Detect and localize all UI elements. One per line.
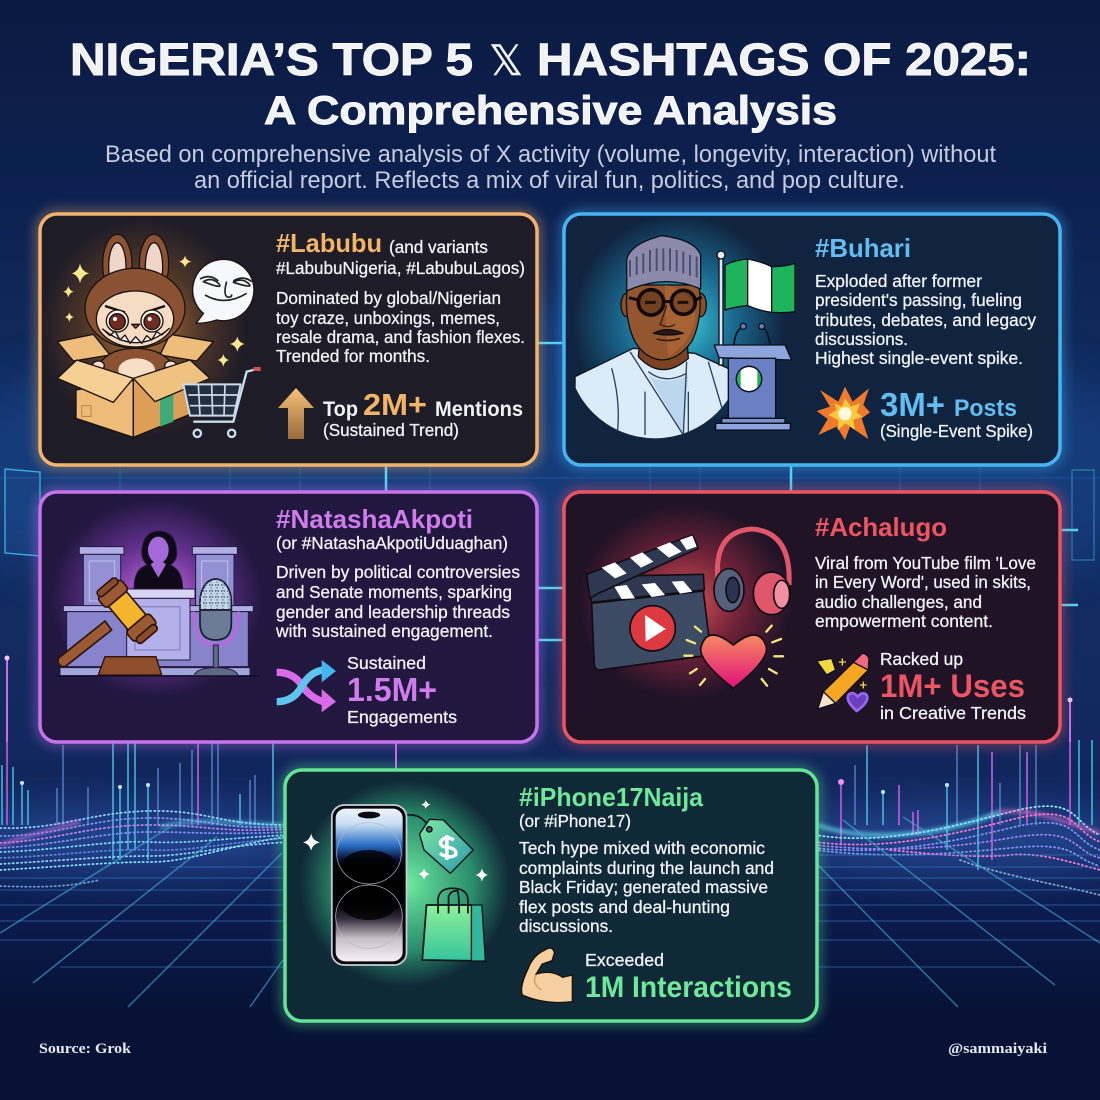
stat: 1M interactions: Exceeded xyxy=(585,950,664,970)
description xyxy=(815,271,1036,368)
stat: 3M+ posts: (Single-Event Spike) xyxy=(880,421,1033,441)
hashtag variants xyxy=(276,237,525,278)
description: discussions. xyxy=(815,329,908,349)
description: president's passing, fueling xyxy=(815,290,1022,310)
description: in Every Word', used in skits, xyxy=(815,572,1031,592)
description: empowerment content. xyxy=(815,611,993,631)
description: Tech hype mixed with economic xyxy=(519,838,765,858)
title: A Comprehensive Analysis xyxy=(264,89,837,133)
panel: #NatashaAkpoti xyxy=(40,492,537,742)
dotted waves xyxy=(0,806,1100,895)
meme bubble xyxy=(193,259,254,323)
description: Exploded after former xyxy=(815,271,982,291)
stat: 1M+ uses: in Creative Trends xyxy=(880,703,1026,723)
subtitle text: Based on comprehensive analysis of X activity (volume, longevity, interaction) without xyxy=(105,141,996,168)
gavel xyxy=(58,621,112,667)
heading: #iPhone17Naija xyxy=(519,782,704,812)
panel: #Buhari xyxy=(564,214,1060,465)
heading: #NatashaAkpoti xyxy=(276,504,473,534)
source credit: Source: Grok xyxy=(39,1041,132,1057)
stat: 2M+ mentions: (Sustained Trend) xyxy=(323,420,459,440)
woman silhouette xyxy=(134,531,183,589)
stat: 1.5M+ engagements: Engagements xyxy=(347,707,457,727)
panel: #Labubu xyxy=(40,214,537,465)
icon: Labubu in a box with meme and cart xyxy=(40,218,261,438)
stat: 1M interactions xyxy=(585,950,792,1004)
stat: 3M+ posts: Posts xyxy=(954,395,1017,422)
title: NIGERIA’S TOP 5 xyxy=(70,34,473,85)
title: 𝕏 xyxy=(489,36,523,85)
icon: shuffle arrows xyxy=(277,660,336,712)
description: audio challenges, and xyxy=(815,592,982,612)
stat: 1.5M+ engagements: 1.5M+ xyxy=(347,671,437,708)
description: with sustained engagement. xyxy=(275,621,493,641)
stat: 2M+ mentions: Mentions xyxy=(435,398,523,421)
stat: 2M+ mentions: 2M+ xyxy=(363,387,427,422)
equalizer bars xyxy=(2,740,1092,870)
subtitle text xyxy=(105,141,996,194)
sparkles xyxy=(63,256,245,367)
stat: 3M+ posts: 3M+ xyxy=(880,386,945,423)
icon: phone, price tag and shopping bag xyxy=(300,780,510,987)
description: Viral from YouTube film 'Love xyxy=(815,553,1036,573)
icon: clapperboard, headphones and heart xyxy=(578,505,792,698)
hashtag variants: #LabubuNigeria, #LabubuLagos) xyxy=(276,258,525,278)
stat: 1M+ uses: Racked up xyxy=(880,649,963,669)
description: Black Friday; generated massive xyxy=(519,877,768,897)
stat: 1M+ uses xyxy=(880,649,1026,723)
microphone xyxy=(193,612,238,645)
description: tributes, debates, and legacy xyxy=(815,310,1036,330)
podium xyxy=(734,327,770,345)
stat: 1.5M+ engagements: Sustained xyxy=(347,653,426,673)
author handle: @sammaiyaki xyxy=(948,1041,1047,1057)
title: HASHTAGS OF 2025: xyxy=(537,34,1031,85)
heading: #Buhari xyxy=(815,233,911,263)
icon: explosion xyxy=(817,387,870,440)
cart xyxy=(183,368,261,437)
description xyxy=(815,553,1036,631)
description: Highest single-event spike. xyxy=(815,348,1023,368)
icon: flexed bicep xyxy=(522,948,572,1002)
stat: 1M+ uses: 1M+ Uses xyxy=(880,668,1025,704)
heading: #Achalugo xyxy=(815,512,947,542)
subtitle text: an official report. Reflects a mix of viral fun, politics, and pop culture. xyxy=(194,167,905,194)
description: discussions. xyxy=(519,916,613,936)
title xyxy=(70,34,1031,133)
description: toy craze, unboxings, memes, xyxy=(276,308,500,328)
stat: 1M interactions: 1M Interactions xyxy=(585,971,792,1004)
description: Driven by political controversies xyxy=(276,562,520,582)
description xyxy=(276,288,525,366)
robe xyxy=(575,348,732,442)
flag xyxy=(719,258,723,365)
description: Trended for months. xyxy=(276,346,430,366)
perspective floor grid xyxy=(0,855,1100,1008)
description: resale drama, and fashion flexes. xyxy=(276,327,525,347)
description: gender and leadership threads xyxy=(276,602,510,622)
hashtag variants: (and variants xyxy=(389,237,488,257)
panel: #Achalugo xyxy=(564,492,1060,742)
icon: up arrow xyxy=(278,388,314,439)
description: flex posts and deal-hunting xyxy=(519,897,730,917)
description xyxy=(519,838,774,936)
stat: 1.5M+ engagements xyxy=(347,653,457,727)
icon: pencil with sparkles xyxy=(817,653,869,711)
heading: #Labubu xyxy=(276,228,382,258)
panel: #iPhone17Naija xyxy=(285,770,817,1021)
description xyxy=(275,562,520,641)
alternate hashtag: (or #NatashaAkpotiUduaghan) xyxy=(276,533,508,553)
description: complaints during the launch and xyxy=(519,858,774,878)
stat: 3M+ posts xyxy=(880,386,1033,441)
stat: 2M+ mentions xyxy=(323,387,523,440)
icon: senate, gavel and microphone xyxy=(50,498,263,698)
description: and Senate moments, sparking xyxy=(276,582,512,602)
icon: portrait, flag and podium xyxy=(572,215,795,442)
stat: 2M+ mentions: Top xyxy=(323,398,358,421)
alternate hashtag: (or #iPhone17) xyxy=(519,811,631,831)
description: Dominated by global/Nigerian xyxy=(276,288,501,308)
